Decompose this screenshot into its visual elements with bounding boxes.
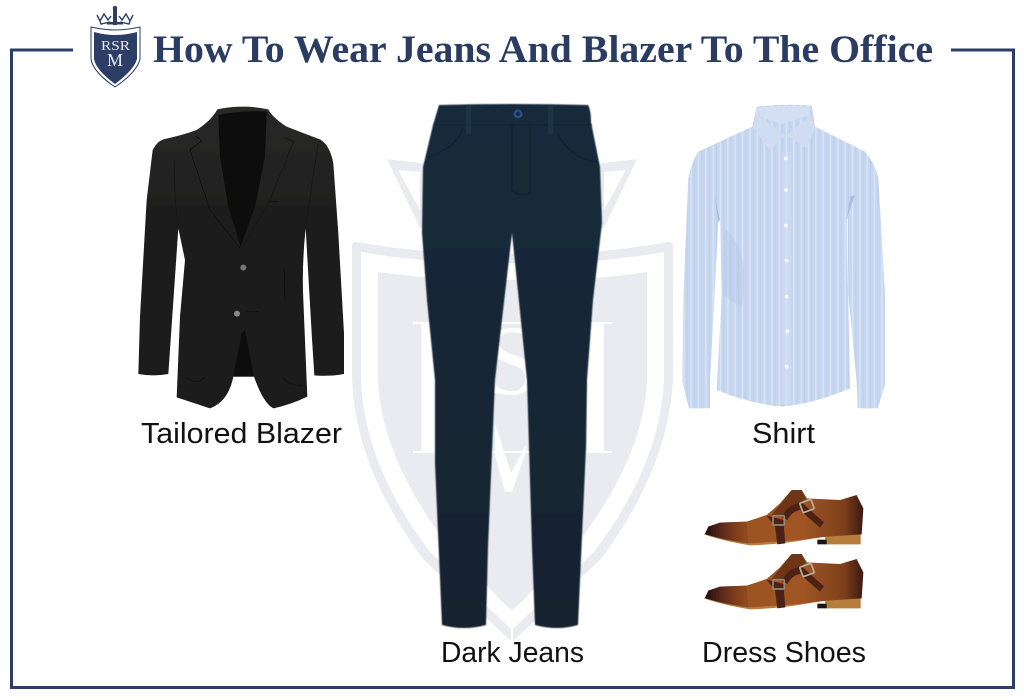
- logo: crown, sword and shield: RSR: [101, 39, 131, 54]
- watermark shield logo: S: [484, 305, 540, 416]
- label: dress shoes: Dress Shoes: [702, 637, 866, 669]
- label: dark jeans: Dark Jeans: [441, 637, 584, 669]
- title: How To Wear Jeans And Blazer To The Office: [153, 28, 933, 71]
- garment: dark jeans: [422, 104, 602, 628]
- garment: dress shoes, bottom: [704, 554, 863, 609]
- logo: crown, sword and shield: [91, 6, 140, 87]
- label: tailored blazer: Tailored Blazer: [141, 418, 342, 450]
- logo: crown, sword and shield: M: [107, 50, 123, 70]
- garment: tailored blazer: [138, 107, 344, 408]
- garment: dress shoes, top: [704, 490, 863, 545]
- watermark shield logo: [352, 159, 673, 642]
- label: shirt: Shirt: [752, 418, 815, 450]
- garment: shirt: [682, 105, 885, 408]
